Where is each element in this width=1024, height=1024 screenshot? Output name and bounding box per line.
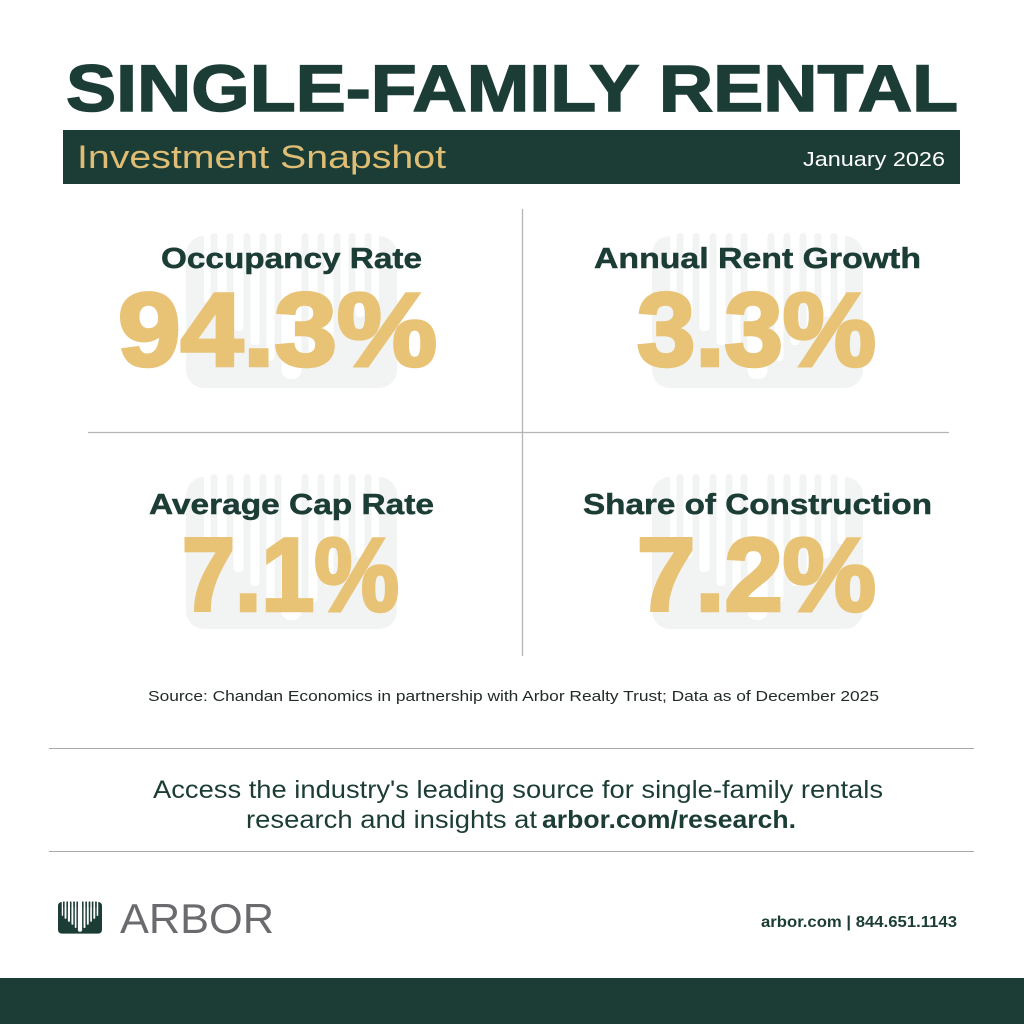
logo: [58, 895, 274, 942]
date: January 2026: [803, 149, 945, 171]
contact details: arbor.com | 844.651.1143: [761, 914, 957, 931]
title: SINGLE-FAMILY RENTAL: [66, 51, 958, 125]
panel: average cap rate: [149, 464, 434, 634]
call to action: arbor.com/research.: [542, 806, 796, 834]
value: 7.1%: [182, 518, 399, 634]
wordmark: ARBOR: [120, 895, 274, 942]
label: Occupancy Rate: [161, 243, 422, 275]
subtitle: Investment Snapshot: [77, 139, 446, 175]
watermark icon: [652, 223, 863, 388]
icon: arbor mark: [58, 899, 102, 934]
call to action: Access the industry's leading source for single-family rentals: [153, 776, 883, 804]
watermark icon: [186, 223, 397, 388]
footer bar: [0, 978, 1024, 1024]
label: Share of Construction: [583, 489, 932, 521]
call to action: research and insights at: [246, 806, 537, 834]
panel: occupancy rate: [118, 223, 437, 388]
label: Annual Rent Growth: [594, 243, 921, 275]
panel: annual rent growth: [594, 223, 921, 388]
value: 7.2%: [637, 518, 876, 634]
panel: share of construction: [583, 464, 932, 634]
call to action: [49, 748, 974, 852]
quadrant dividers: [88, 209, 949, 656]
watermark icon: [652, 464, 863, 629]
value: 3.3%: [637, 272, 876, 388]
subtitle banner: [63, 130, 960, 184]
label: Average Cap Rate: [149, 489, 434, 521]
value: 94.3%: [118, 272, 437, 388]
watermark icon: [186, 464, 397, 629]
source note: Source: Chandan Economics in partnership with Arbor Realty Trust; Data as of December 2025: [148, 688, 879, 705]
